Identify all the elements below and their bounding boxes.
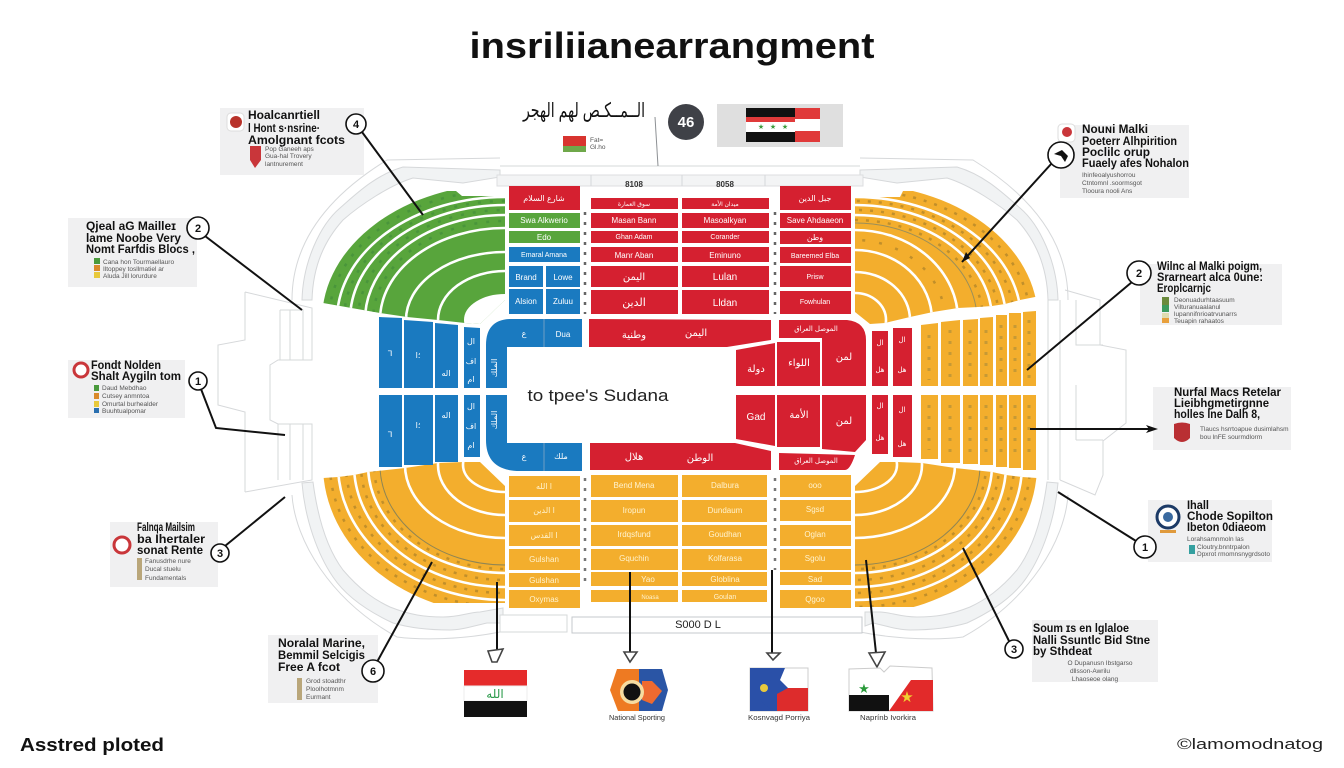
seating: lower centre grid: ooo	[808, 481, 822, 490]
seating: upper centre grid: Lulan	[713, 272, 737, 283]
pointer: left 1: 1	[195, 376, 201, 388]
pointer: right upper 2: 2	[1136, 268, 1142, 280]
callout: bottom right: Lhaoseoe olang	[1072, 676, 1119, 683]
callout: right middle: holles lne Dalh 8,	[1174, 407, 1260, 421]
badge: count 46	[668, 104, 704, 140]
seating: orange lower-left stands	[324, 462, 505, 603]
pointer: left 3: 3	[217, 548, 223, 560]
caption: split flag: Naprínb Ivorkira	[860, 713, 917, 722]
callout: right upper: Vilturanuaalanul	[1174, 304, 1221, 311]
seating: red centre blocks: لمن	[836, 416, 852, 427]
seating: blue left columns: ᒣ	[388, 349, 393, 358]
seating: lower centre grid: Sgolu	[805, 554, 825, 563]
seating: blue left columns: ؛ا	[416, 351, 420, 360]
callout: right middle: Lieibhgmetirgnne	[1174, 396, 1269, 410]
pointer: right lower 1: 1	[1142, 542, 1148, 554]
seating: orange lower-right stands	[855, 462, 1036, 607]
seating: lower centre grid: Goulan	[714, 594, 736, 601]
pointer: bottom right 3: 3	[1011, 644, 1017, 656]
callout: right upper	[1140, 259, 1282, 325]
callout: top right: Poeterr Alhpirition	[1082, 134, 1177, 148]
flag: blue white red	[750, 668, 808, 711]
seating: blue left columns: ام	[467, 375, 475, 384]
seating: red centre blocks: الموصل العراق	[794, 458, 838, 465]
seating: blue left columns: ال	[467, 402, 475, 411]
callout: right middle	[1153, 385, 1291, 450]
seating: upper centre grid: Bareemed Elba	[791, 253, 839, 260]
seating: blue left columns: ع	[522, 329, 527, 338]
callout: bottom right: Nalli Ssuntlc Bid Stne	[1033, 633, 1150, 647]
top flag panel: ★	[770, 123, 776, 131]
seating: upper centre grid: سوق العمارة	[618, 201, 650, 208]
seating: lower centre grid: Oxymas	[529, 595, 559, 604]
seating: blue left columns: اف	[466, 422, 476, 431]
flag: split green star and red: ★	[858, 681, 870, 696]
seating: red centre blocks: ال	[898, 337, 906, 344]
seating: lower centre grid: ا القدس	[530, 531, 558, 540]
callout: right lower: Cloutry.bnntrpalon	[1197, 544, 1250, 551]
seating: red centre blocks: ال	[876, 403, 884, 410]
seating: red centre blocks: ال	[876, 340, 884, 347]
vertical divider callout line	[655, 117, 658, 166]
callout: top left: Gua-hal Trovery	[265, 153, 312, 160]
callout: right upper: Deonuadurhtaasuum	[1174, 297, 1235, 304]
pointer: left 2: 2	[195, 223, 201, 235]
callout: right middle: Nurfal Macs Retelar	[1174, 385, 1281, 399]
callout: left middle: Shalt Aygiln tom	[91, 369, 181, 383]
logo: orange and blue crest	[610, 669, 668, 711]
seating: upper centre grid: وطن	[807, 233, 823, 242]
seating: lower centre grid: ا الله	[536, 482, 552, 491]
seating: red centre blocks: الوطن	[687, 453, 713, 464]
seating: red centre blocks: دولة	[747, 364, 765, 375]
top flag panel: ★	[782, 123, 788, 131]
seating: upper centre grid: Brand	[515, 273, 537, 282]
seating: orange upper-right stands	[855, 191, 1036, 324]
pointer: bottom right 3	[963, 548, 1023, 658]
seating: blue left columns: اله	[442, 369, 450, 378]
callout: left upper: lame Noobe Very	[86, 231, 181, 245]
callout: left middle	[68, 358, 185, 418]
callout: bottom left: Bemmil Selcigis	[278, 648, 365, 662]
callout: right upper: Wilnc al Malki poigm,	[1157, 259, 1262, 273]
stadium pitch label box: S000 D L	[675, 619, 721, 631]
seating: lower centre grid: Iropun	[623, 506, 645, 515]
centre field label: to tpee's Sudana	[528, 386, 669, 405]
callout: bottom right: by Sthdeat	[1033, 644, 1092, 658]
seating: upper centre grid: Alsion	[515, 297, 537, 306]
callout: left lower: ba Ihertaler	[137, 532, 205, 546]
callout: left lower: Ducal stuelu	[145, 566, 181, 573]
seating: lower centre grid: Yao	[641, 575, 655, 584]
callout: bottom left: Eurmant	[306, 694, 331, 701]
callout: bottom left: Ploolhotmnm	[306, 686, 344, 693]
seating: blue left columns	[379, 317, 582, 471]
callout: top right: Poclilc orup	[1082, 145, 1150, 159]
title: insriliianearrangment	[470, 25, 875, 66]
flag: split green star and red	[849, 666, 933, 711]
seating: red centre blocks: هل	[876, 435, 885, 442]
seating: green upper-left stands	[324, 191, 505, 324]
seating: red centre blocks: هلال	[625, 452, 643, 463]
seating: lower centre grid: Qgoo	[805, 595, 825, 604]
caption: logo: National Sporting	[609, 713, 665, 722]
seating: upper centre grid: Zuluu	[553, 297, 573, 306]
seating: blue left columns: ملك	[554, 452, 568, 461]
seating: lower centre grid: Noasa	[641, 595, 659, 601]
seating: red centre blocks: اليمن	[685, 328, 707, 339]
callout: bottom left: Noralal Marine,	[278, 636, 365, 650]
callout: left upper: Nomt Farfdis Blocs ,	[86, 242, 195, 256]
seating: red centre blocks	[589, 319, 912, 470]
flag: split green star and red: ★	[900, 689, 914, 706]
callout: left lower	[110, 520, 218, 587]
callout: left upper: Iltoppey tosllmatiel ar	[103, 266, 165, 273]
callout: right lower: Ihall	[1187, 498, 1209, 512]
stand labels above the upper grid	[625, 180, 734, 189]
callout: left lower: Falnqa Mailsim	[137, 520, 195, 534]
seating: lower centre grid: ا الدين	[533, 506, 555, 515]
seating: upper centre grid: Eminuno	[709, 251, 741, 260]
flag: Iraq: الله	[486, 687, 504, 701]
seating: blue left columns: اف	[466, 357, 476, 366]
top flag panel: ★	[758, 123, 764, 131]
seating: blue left columns: Dua	[556, 330, 571, 339]
callout: right upper: Teuapin rahaatos	[1174, 318, 1225, 325]
seating: upper centre grid: Fowhulan	[800, 299, 830, 306]
seating: blue left columns: الملك	[490, 359, 499, 377]
seating: lower centre grid: Oglan	[804, 530, 826, 539]
seating: upper centre grid: Masan Bann	[612, 216, 656, 225]
callout: right lower: Lorahsamnmoln las	[1187, 536, 1244, 543]
callout: top right: Ctntomnl .soormsgot	[1082, 180, 1142, 187]
seating: lower centre grid	[509, 475, 851, 608]
seating: upper centre grid: Prisw	[806, 274, 824, 281]
seating: lower centre grid: Kolfarasa	[708, 554, 742, 563]
callout: right lower: Dpxrot rmomnsnygrdsoto	[1197, 551, 1270, 558]
seating: upper centre grid: Save Ahdaaeon	[787, 216, 843, 225]
callout: right upper: Eroplcarnjc	[1157, 281, 1211, 295]
callout: left middle: Fondt Nolden	[91, 358, 161, 372]
top legend flag: Gl.ho	[590, 144, 606, 151]
top legend flag: Fat=	[590, 137, 603, 144]
callout: top left: Pop Ganeeh aps	[265, 146, 315, 153]
seating: upper centre grid: اليمن	[623, 272, 645, 283]
callout: right lower	[1148, 498, 1273, 562]
top legend flag	[563, 136, 606, 152]
pointer: top left 4: 4	[353, 119, 360, 131]
seating: blue left columns: الملك	[490, 411, 499, 429]
callout: top right	[1058, 122, 1189, 198]
arrow: right middle	[1030, 425, 1158, 433]
seating: lower centre grid: Dalbura	[711, 481, 740, 490]
caption: blue white red flag: Kosnvagd Porriya	[748, 713, 811, 722]
seating: blue left columns: ع	[522, 452, 527, 461]
callout: top left: Hoalcanrtiell	[248, 108, 320, 122]
callout: bottom left: Free A fcot	[278, 660, 340, 674]
callout: top left: lantnurement	[265, 161, 303, 168]
seating: lower centre grid: Gquchin	[619, 554, 649, 563]
seating: upper centre grid: Lldan	[713, 298, 737, 309]
seating: lower centre grid: Sad	[808, 575, 822, 584]
seating: lower centre grid: Irdqsfund	[617, 530, 651, 539]
seating: upper centre grid: شارع السلام	[523, 194, 565, 203]
seating: blue left columns: ؛ا	[416, 421, 420, 430]
callout: top right: Nouɴi Malki	[1082, 122, 1148, 136]
footer: left note: Asstred ploted	[20, 735, 164, 755]
top flag panel	[717, 104, 843, 147]
callout: left lower: sonat Rente	[137, 543, 203, 557]
seating: red centre blocks: الأمة	[789, 408, 809, 421]
callout: left lower: Fanusdrhe nure	[145, 558, 191, 565]
seating: red centre blocks: Gad	[747, 412, 765, 423]
flag: Iraq	[464, 670, 527, 717]
callout: top left	[220, 108, 364, 175]
seating: red centre blocks: هل	[898, 367, 907, 374]
callout: bottom right: O Dupanusn Ibstgarso	[1067, 660, 1133, 667]
callout: left middle: Omurtal burhealder	[102, 401, 159, 408]
seating: lower centre grid: Dundaum	[708, 506, 743, 515]
callout: bottom right: Soum ɪs en lglaloe	[1033, 621, 1129, 635]
callout: left lower: Fundamentals	[145, 575, 187, 582]
seating: blue left columns: ᒣ	[388, 430, 393, 439]
seating: blue left columns: اله	[442, 411, 450, 420]
seating: red centre blocks: ال	[898, 407, 906, 414]
seating: red centre blocks: وطنية	[622, 330, 646, 341]
seating: red centre blocks: الموصل العراق	[794, 326, 838, 333]
seating: lower centre grid: Gulshan	[529, 576, 559, 585]
callout: top left: Amolgnant fcots	[248, 133, 345, 147]
pointer: bottom left 6: 6	[370, 666, 376, 678]
badge: count 46: 46	[678, 114, 694, 131]
callout: left upper	[68, 218, 197, 287]
seating: upper centre grid: Edo	[537, 233, 552, 242]
stadium outer structure	[218, 158, 1126, 639]
pointer: right lower 1	[1058, 492, 1156, 558]
seating: upper centre grid: Ghan Adam	[616, 234, 653, 241]
pointer: top right	[962, 142, 1074, 262]
pointer: left 2	[187, 217, 302, 310]
callout: left upper: Aluda Jill lorurdure	[103, 273, 157, 280]
callout: bottom right	[1032, 620, 1158, 683]
seating: red centre blocks: لمن	[836, 352, 852, 363]
seating: upper centre grid: جبل الدين	[799, 194, 831, 203]
callout: right upper: Srarneart alca 0une:	[1157, 270, 1263, 284]
callout: left upper: Cana hon Tourmaellauro	[103, 259, 174, 266]
seating: red centre blocks: هل	[876, 367, 885, 374]
seating: red centre blocks: هل	[898, 441, 907, 448]
arrows: down to team flags	[488, 560, 885, 667]
pointer: left 1	[189, 372, 285, 435]
seating: blue left columns: ال	[467, 337, 475, 346]
stadium pitch label box	[572, 617, 862, 633]
seating: lower centre grid: Goudhan	[709, 530, 741, 539]
seating: lower centre grid: Bend Mena	[614, 481, 655, 490]
callout: left middle: Daud Mebdhao	[102, 385, 147, 392]
callout: bottom right: dllsson-Awrilu	[1070, 668, 1110, 675]
seating: upper centre grid: Lowe	[553, 273, 573, 282]
callout: right middle: Tlaucs hsrrtoapue dusimlahsm	[1200, 426, 1289, 433]
pointer: left 3	[211, 497, 285, 562]
callout: right lower: Ibeton 0diaeom	[1187, 520, 1266, 534]
seating: upper centre grid: Emaral Amana	[521, 252, 567, 259]
callout: top right: Ihinfeoalyushorrou	[1082, 172, 1136, 179]
seating: upper centre grid: Masoalkyan	[704, 216, 746, 225]
seating: orange right columns	[921, 311, 1036, 470]
callout: right upper: lupannifnrioatrvunarrs	[1174, 311, 1238, 318]
callout: bottom left	[268, 635, 378, 703]
top centre Arabic heading: الــمــكـص لهم الهجر	[522, 100, 645, 122]
callout: left upper: Qjeal aG Mailleɪ	[86, 219, 176, 233]
pointer: right upper 2	[1027, 261, 1151, 370]
pointer: bottom left 6	[362, 562, 432, 682]
seating: upper centre grid	[509, 186, 851, 314]
seating: upper centre grid: Corander	[710, 234, 740, 241]
callout: bottom left: Grod stoadthr	[306, 678, 347, 685]
stand labels above the upper grid: 8108	[625, 180, 643, 189]
seating: upper centre grid: الدين	[622, 297, 646, 309]
pointer: top left 4	[346, 114, 423, 215]
footer: right credit: ©lamomodnatog	[1177, 736, 1323, 753]
callout: right middle: bou lnFE sourmdlorm	[1200, 434, 1262, 441]
callout: top right: Fuaely afes Nohalon	[1082, 156, 1189, 170]
callout: left middle: Buuhtualpomar	[102, 408, 147, 415]
seating: upper centre grid: Manr Aban	[615, 251, 653, 260]
seating: lower centre grid: Gulshan	[529, 555, 559, 564]
seating: lower centre grid: Sgsd	[806, 505, 824, 514]
callout: left middle: Cutsey anmntoa	[102, 393, 150, 400]
seating: upper centre grid: ميدان الأمة	[711, 200, 739, 208]
callout: top left: l Hont s·nsrine·	[248, 121, 320, 135]
seating: lower centre grid: Globlina	[710, 575, 740, 584]
seating: red centre blocks: اللواء	[788, 358, 810, 369]
seating: blue left columns: ام	[467, 441, 475, 450]
stand labels above the upper grid: 8058	[716, 180, 734, 189]
callout: right lower: Chode Sopilton	[1187, 509, 1273, 523]
seating: upper centre grid: Swa Alkwerio	[520, 216, 568, 225]
callout: top right: Tlooura nooli Ans	[1082, 188, 1133, 195]
